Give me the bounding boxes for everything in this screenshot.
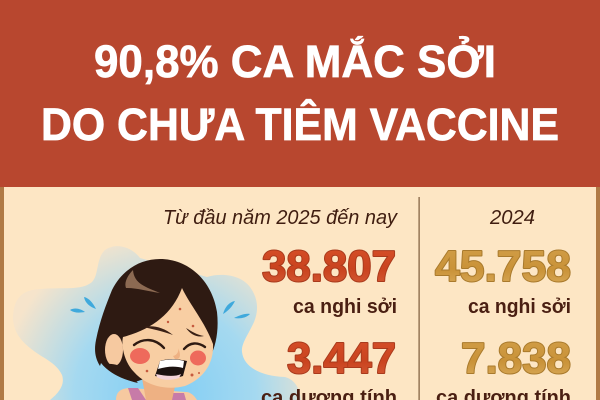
right border xyxy=(596,186,600,400)
divider xyxy=(418,197,420,400)
cheek right xyxy=(190,350,206,366)
title xyxy=(41,36,559,150)
stat: 3.447: 3.447 xyxy=(287,334,396,383)
shoulders and top xyxy=(116,388,197,400)
sweat drops left xyxy=(70,297,96,313)
eyebrow right xyxy=(186,328,204,337)
header band xyxy=(0,0,600,187)
neck xyxy=(142,378,176,400)
background blob xyxy=(13,246,301,400)
nose xyxy=(173,348,180,359)
column heading: 2024: 2024 xyxy=(489,207,535,229)
title: DO CHƯA TIÊM VACCINE xyxy=(41,99,559,150)
label: ca nghi sởi 2024: ca nghi sởi xyxy=(468,296,571,318)
title: 90,8% CA MẮC SỞI xyxy=(94,36,496,87)
lower hair strand xyxy=(103,364,138,383)
stat: 45.758: 45.758 xyxy=(435,242,571,291)
hair back xyxy=(95,259,218,382)
sweat drops right xyxy=(223,301,250,318)
label: ca nghi sởi 2025: ca nghi sởi xyxy=(293,296,397,318)
mouth xyxy=(155,359,187,380)
eyes closed xyxy=(134,340,205,349)
ear xyxy=(105,334,123,366)
hair highlight xyxy=(125,270,160,293)
stat: 38.807: 38.807 xyxy=(262,242,396,291)
illustration: crying child with measles xyxy=(13,246,301,400)
face xyxy=(122,288,213,388)
measles spots xyxy=(146,308,200,376)
left border xyxy=(0,186,4,400)
column heading: 2025: Từ đầu năm 2025 đến nay xyxy=(163,207,398,229)
stat: 7.838: 7.838 xyxy=(461,334,571,383)
cheek left xyxy=(130,348,150,364)
eyebrow left xyxy=(143,326,173,335)
